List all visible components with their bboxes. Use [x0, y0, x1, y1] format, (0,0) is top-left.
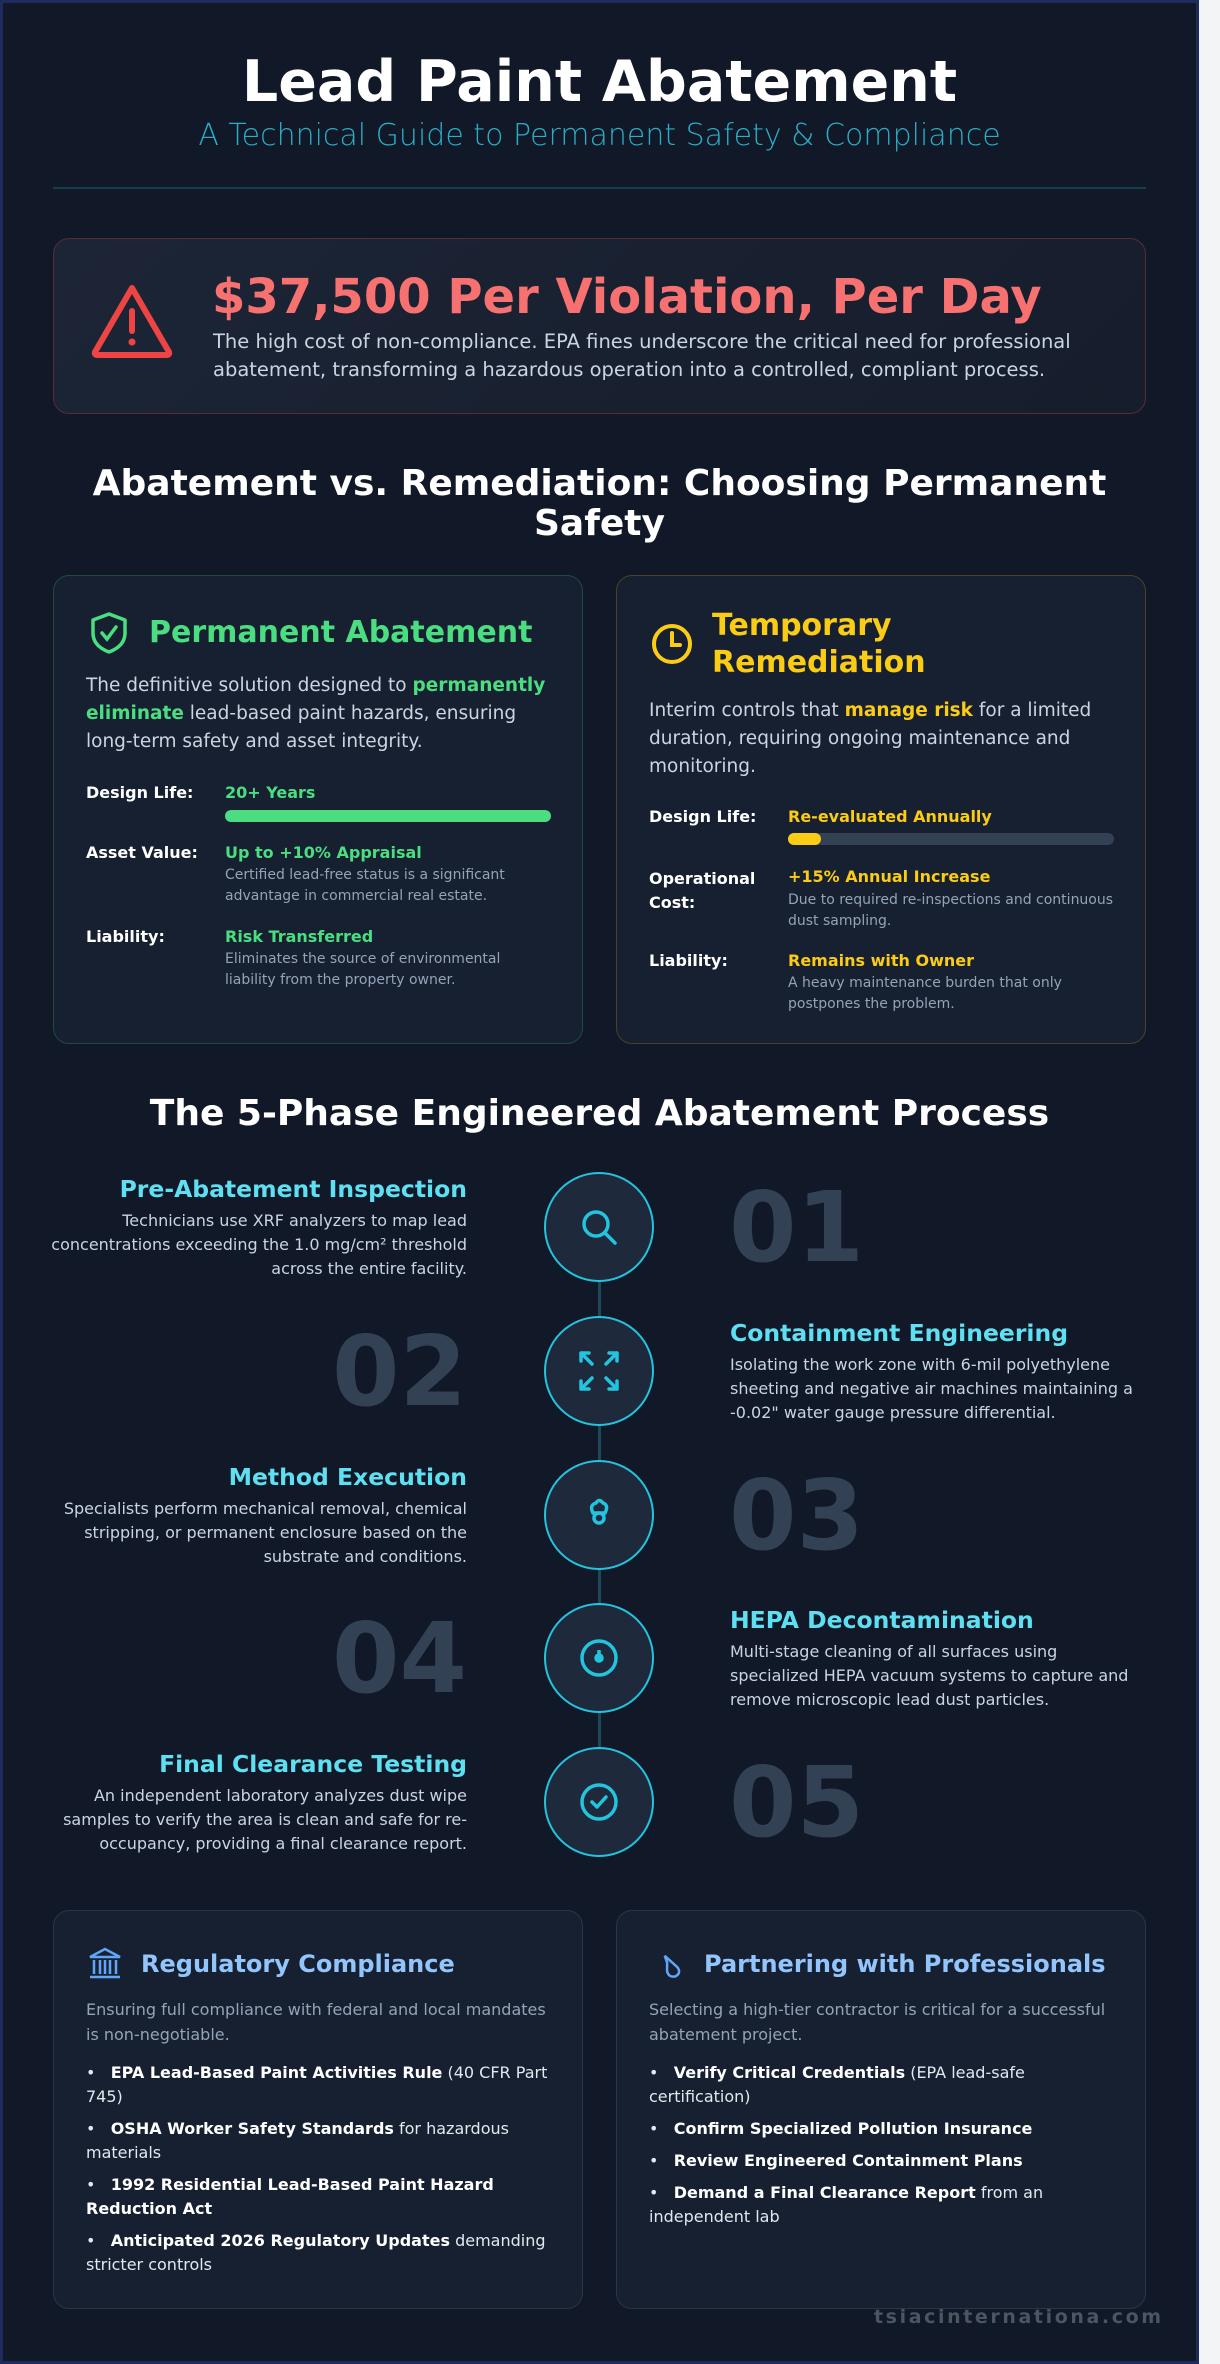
row: operational cost: Cost: [649, 893, 695, 912]
panel: partnering with professionals [616, 1910, 1146, 2309]
intro: Ensuring full compliance with federal and local mandates is non-negotiable. [86, 2000, 546, 2044]
panel: permanent abatement: Risk Transferred [225, 927, 373, 946]
step 5 title: Final Clearance Testing [159, 1750, 467, 1778]
bullet list: • Anticipated 2026 Regulatory Updates demanding stricter controls [86, 2231, 546, 2274]
row: liability: Liability: [86, 927, 165, 946]
row: liability: Liability: [649, 951, 728, 970]
icon: warning triangle [92, 285, 172, 358]
heading: Permanent Abatement [149, 615, 532, 650]
panel: permanent abatement: Up to +10% Appraisal [225, 843, 422, 862]
alert panel [53, 238, 1146, 414]
step 5 [63, 1746, 864, 1859]
heading: Partnering with Professionals [704, 1950, 1106, 1978]
panel: temporary remediation: +15% Annual Increase [788, 867, 990, 886]
row: operational cost [649, 869, 755, 912]
step 3 title: Method Execution [229, 1463, 467, 1491]
row: design life: Design Life: [649, 807, 756, 826]
panel: temporary remediation: Due to required re-inspections and continuous dust sampling. [788, 892, 1113, 929]
bullet list: • Verify Critical Credentials (EPA lead-safe certification) [649, 2063, 1025, 2106]
timeline connector [598, 1230, 601, 1805]
bullet list: • Confirm Specialized Pollution Insurance [649, 2119, 1032, 2138]
step 2 number: 02 [332, 1315, 467, 1428]
step 2 [332, 1315, 1133, 1428]
bullet list: • Review Engineered Containment Plans [649, 2151, 1023, 2170]
panel: temporary remediation: Re-evaluated Annually [788, 807, 992, 826]
step 5 number: 05 [729, 1746, 864, 1859]
step 4 title: HEPA Decontamination [730, 1606, 1034, 1634]
step 1 title: Pre-Abatement Inspection [120, 1175, 467, 1203]
step 3 text: Specialists perform mechanical removal, chemical stripping, or permanent enclosure based on the substrate and conditions. [64, 1499, 467, 1566]
icon: containment arrows circle [544, 1316, 654, 1426]
heading: Regulatory Compliance [141, 1950, 455, 1978]
icon: shield [91, 612, 127, 654]
step 3 [64, 1459, 864, 1572]
alert heading: $37,500 Per Violation, Per Day [212, 269, 1042, 325]
description: The definitive solution designed to permanently eliminate lead-based paint hazards, ensuring long-term safety and asset integrity. [86, 675, 545, 752]
row: design life: Design Life: [86, 783, 193, 802]
panel: permanent abatement [53, 575, 583, 1044]
heading: Temporary [712, 608, 892, 643]
icon: method circle [544, 1460, 654, 1570]
panel: temporary remediation: Remains with Owner [788, 951, 974, 970]
icon: building [90, 1948, 120, 1978]
subtitle: A Technical Guide to Permanent Safety & Compliance [198, 118, 1001, 153]
step 2 text: Isolating the work zone with 6-mil polyethylene sheeting and negative air machines maintaining a -0.02" water gauge pressure differential. [730, 1355, 1133, 1422]
panel: temporary remediation: A heavy maintenance burden that only postpones the problem. [788, 975, 1062, 1012]
step 1 number: 01 [729, 1171, 864, 1284]
bullet list: • 1992 Residential Lead-Based Paint Hazard Reduction Act [86, 2175, 494, 2218]
step 1 [51, 1171, 864, 1284]
heading [712, 608, 926, 680]
bullet list: • Demand a Final Clearance Report from an independent lab [649, 2183, 1043, 2226]
bullet list: • EPA Lead-Based Paint Activities Rule (40 CFR Part 745) [86, 2063, 547, 2106]
step 2 title: Containment Engineering [730, 1319, 1068, 1347]
bullet list [86, 2063, 548, 2274]
row: asset value: Asset Value: [86, 843, 198, 862]
step 4 number: 04 [332, 1602, 467, 1715]
panel: regulatory compliance [53, 1910, 583, 2309]
row: operational cost: Operational [649, 869, 755, 888]
panel: permanent abatement: 20+ Years [225, 783, 315, 802]
bullet list [649, 2063, 1043, 2226]
icon: check circle [544, 1747, 654, 1857]
panel: permanent abatement: Eliminates the source of environmental liability from the property owner. [225, 951, 500, 988]
bullet list: • OSHA Worker Safety Standards for hazardous materials [86, 2119, 509, 2162]
title: Lead Paint Abatement [242, 49, 957, 115]
panel: permanent abatement: Certified lead-free status is a significant advantage in commercial real estate. [225, 867, 505, 904]
section heading: comparison: Abatement vs. Remediation: Choosing Permanent Safety [93, 463, 1106, 544]
alert text: The high cost of non-compliance. EPA fines underscore the critical need for professional abatement, transforming a hazardous operation into a controlled, compliant process. [213, 330, 1071, 381]
step 3 number: 03 [729, 1459, 864, 1572]
icon: HEPA circle [544, 1603, 654, 1713]
heading: Remediation [712, 645, 926, 680]
description: Interim controls that manage risk for a limited duration, requiring ongoing maintenance and monitoring. [649, 700, 1091, 777]
icon: drop [664, 1954, 680, 1978]
icon: clock [652, 624, 692, 664]
step 5 text: An independent laboratory analyzes dust wipe samples to verify the area is clean and safe for re-occupancy, providing a final clearance report. [63, 1786, 467, 1853]
intro: Selecting a high-tier contractor is critical for a successful abatement project. [649, 2000, 1105, 2044]
footer watermark: tsiacinternationa.com [874, 2306, 1164, 2328]
step 1 text: Technicians use XRF analyzers to map lead concentrations exceeding the 1.0 mg/cm² threshold across the entire facility. [51, 1211, 467, 1278]
step 4 [332, 1602, 1128, 1715]
icon: magnifier circle [544, 1172, 654, 1282]
section heading: process: The 5-Phase Engineered Abatement Process [150, 1093, 1049, 1134]
panel: temporary remediation [616, 575, 1146, 1044]
step 4 text: Multi-stage cleaning of all surfaces using specialized HEPA vacuum systems to capture and remove microscopic lead dust particles. [730, 1642, 1128, 1709]
